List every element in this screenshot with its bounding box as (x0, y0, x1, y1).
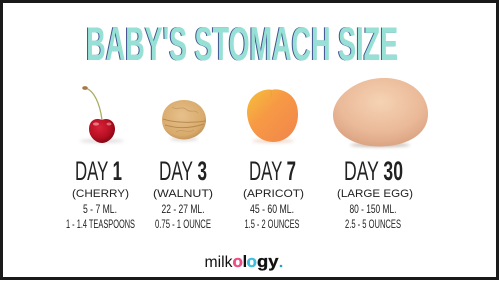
icon: walnut (162, 100, 206, 141)
logo: milkology: gy (257, 252, 279, 271)
day 7 amounts: 1.5 - 2 OUNCES (244, 217, 300, 231)
icon: cherry (80, 86, 124, 143)
day 7 heading: DAY 7 (249, 156, 296, 186)
cherry label: (CHERRY) (72, 188, 129, 200)
day 30 amounts: 2.5 - 5 OUNCES (345, 217, 401, 231)
day 1 amounts: 1 - 1.4 TEASPOONS (66, 217, 135, 231)
logo: milkology (204, 252, 282, 271)
large egg label: (LARGE EGG) (337, 188, 413, 200)
column: day 1 (66, 156, 135, 231)
day 7 amounts: 45 - 60 ML. (250, 202, 294, 216)
day 3 amounts: 0.75 - 1 OUNCE (155, 217, 211, 231)
day 1 amounts (66, 202, 135, 231)
logo: milkology: l (242, 252, 247, 271)
logo: milkology: o (232, 252, 243, 271)
day 3 amounts (155, 202, 211, 231)
logo: milkology: milk (204, 254, 233, 271)
day 30 amounts: 80 - 150 ML. (350, 202, 396, 216)
logo: milkology: o (246, 252, 257, 271)
day 1 amounts: 5 - 7 ML. (83, 202, 117, 216)
day 1 heading: DAY 1 (75, 156, 122, 186)
walnut label: (WALNUT) (153, 188, 213, 200)
day 7 amounts (244, 202, 300, 231)
day 30 amounts (345, 202, 401, 231)
column: day 30 (337, 156, 413, 231)
icon: apricot (247, 89, 298, 143)
day 3 amounts: 22 - 27 ML. (162, 202, 204, 216)
apricot label: (APRICOT) (243, 188, 304, 200)
day 3 heading: DAY 3 (159, 156, 207, 186)
icon: large egg (333, 78, 428, 147)
day 30 heading: DAY 30 (344, 156, 403, 186)
column: day 3 (153, 156, 213, 231)
column: day 7 (243, 156, 304, 231)
